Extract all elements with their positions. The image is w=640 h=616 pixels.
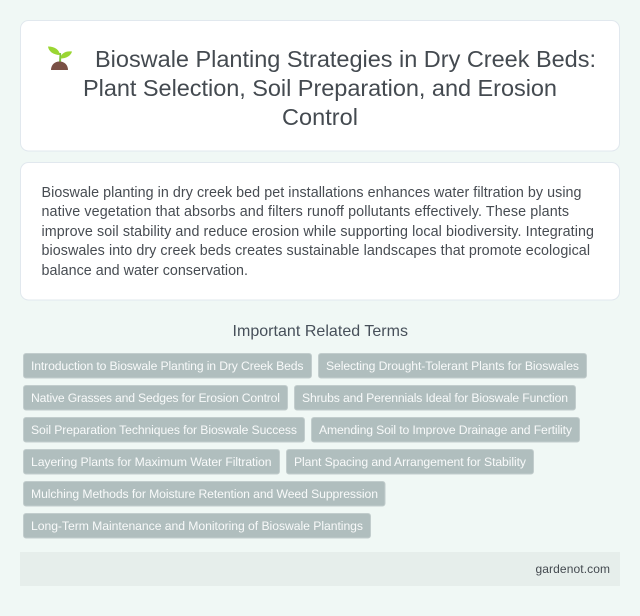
tag: Soil Preparation Techniques for Bioswale Success — [31, 423, 297, 437]
tag: Layering Plants for Maximum Water Filtration — [31, 455, 272, 469]
text block: description: native vegetation that absorbs and filters runoff pollutants effectively. These plants — [42, 204, 569, 220]
tag — [24, 354, 312, 378]
tag — [294, 386, 576, 410]
text block: description: bioswales into dry creek beds creates sustainable landscapes that promote ecological — [42, 243, 590, 259]
title: Bioswale Planting Strategies in Dry Creek Beds: — [95, 46, 596, 72]
tag — [312, 418, 580, 442]
tag: Selecting Drought-Tolerant Plants for Bioswales — [326, 359, 579, 373]
tag: Mulching Methods for Moisture Retention and Weed Suppression — [31, 487, 378, 501]
tag: Amending Soil to Improve Drainage and Fertility — [319, 423, 573, 437]
tag — [286, 450, 534, 474]
title: Control — [282, 104, 358, 130]
tag — [24, 386, 288, 410]
text block: description: improve soil stability and reduce erosion while supporting local biodiversity. Integrating — [42, 224, 594, 240]
text block: description: balance and water conservation. — [42, 263, 248, 279]
tag — [24, 418, 304, 442]
tag — [24, 514, 370, 538]
tag — [318, 354, 586, 378]
tag: Plant Spacing and Arrangement for Stability — [294, 455, 527, 469]
tag list: related terms — [24, 354, 586, 538]
tag: Introduction to Bioswale Planting in Dry Creek Beds — [31, 359, 304, 373]
footer: site name: gardenot.com — [536, 562, 610, 576]
heading: important related terms: Important Related Terms — [232, 323, 408, 340]
tag: Shrubs and Perennials Ideal for Bioswale Function — [302, 391, 568, 405]
panel: description card — [20, 162, 620, 300]
footer bar — [20, 552, 620, 586]
title — [83, 46, 596, 130]
tag: Native Grasses and Sedges for Erosion Control — [31, 391, 280, 405]
panel: title card — [20, 20, 620, 151]
text block: description: Bioswale planting in dry creek bed pet installations enhances water filtration by using — [42, 185, 582, 201]
text block: description — [42, 185, 594, 279]
tag: Long-Term Maintenance and Monitoring of Bioswale Plantings — [31, 519, 363, 533]
icon: seedling — [48, 46, 72, 70]
tag — [24, 450, 280, 474]
title: Plant Selection, Soil Preparation, and Erosion — [83, 75, 557, 101]
tag — [24, 482, 385, 506]
